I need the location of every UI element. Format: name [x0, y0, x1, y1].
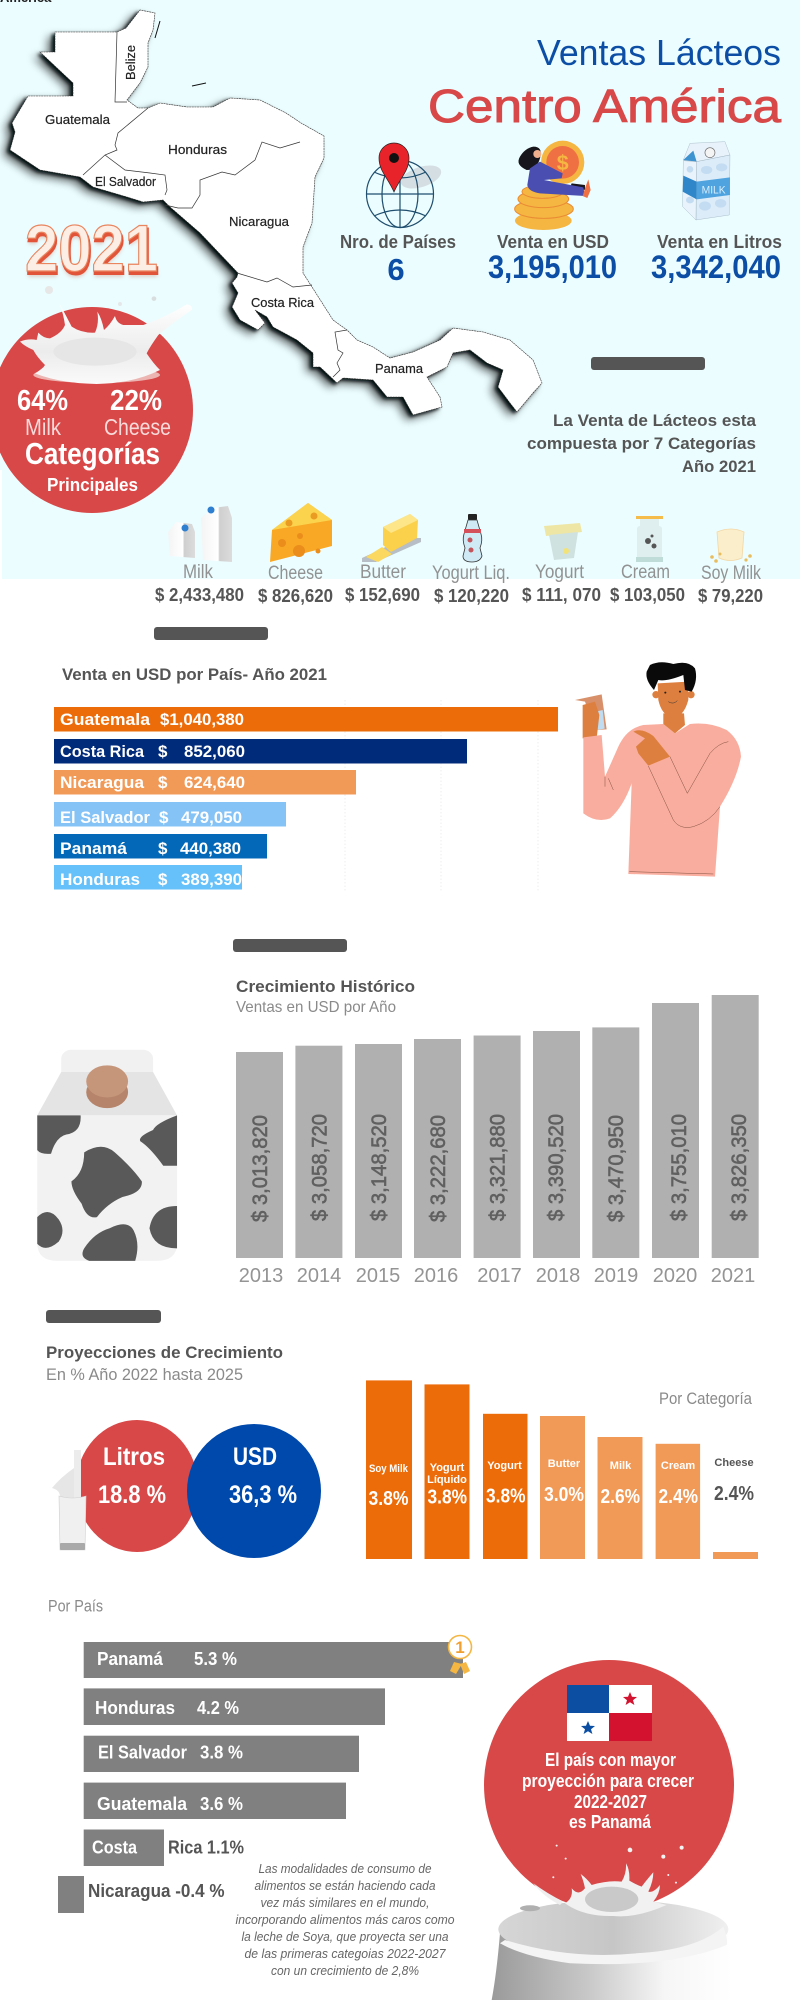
bar chart: categories: Yogurt [487, 1460, 522, 1472]
bar chart: yearly sales: 2017 [477, 1265, 522, 1287]
panel: Panama callout circle: es Panamá [569, 1812, 652, 1832]
bar chart: yearly sales [236, 995, 759, 1287]
bar chart: categories: Cream [661, 1460, 695, 1472]
bar chart: countries projection: Nicaragua -0.4 % [88, 1881, 224, 1901]
bar chart: countries: $ [158, 773, 168, 792]
panel: product categories: $ 120,220 [434, 586, 509, 606]
stat: sales litres: 3,342,040 [651, 249, 781, 285]
panel: historic growth [236, 977, 759, 1287]
panel: litres and USD circles [52, 1420, 321, 1558]
bar chart: categories: 3.8% [428, 1486, 467, 1508]
bar chart: countries projection: Costa [92, 1838, 138, 1858]
stat: sales litres [651, 142, 782, 285]
bar chart: categories: 2.6% [600, 1486, 640, 1508]
bar chart: categories: 3.0% [544, 1484, 584, 1506]
bar chart: yearly sales: $ 3,470,950 [605, 1115, 628, 1222]
panel: header background [0, 0, 800, 579]
panel: product categories: $ 103,050 [610, 585, 685, 605]
bar chart: countries: $ [158, 742, 168, 761]
bar chart: yearly sales: $ 3,222,680 [427, 1115, 450, 1222]
section marker [591, 357, 705, 370]
icon: milk carton: MILK [702, 184, 726, 196]
bar chart: countries: $ [158, 870, 168, 889]
bar chart: categories: 3.8% [368, 1488, 409, 1510]
bar chart: categories: Milk [610, 1460, 632, 1472]
bar chart: categories: Butter [548, 1458, 581, 1470]
year badge 2021: 2021 [26, 214, 159, 288]
bar chart: countries projection: 3.6 % [200, 1794, 243, 1814]
panel: main categories circle: 64% [17, 385, 68, 417]
bar chart: categories: 2.4% [658, 1486, 698, 1508]
panel: sales by country: Venta en USD por País- Año 2021 [62, 665, 327, 684]
panel: Panama callout circle: El país con mayor [545, 1750, 676, 1770]
panel: main categories circle: Categorías [25, 436, 160, 471]
bar chart: countries: Costa Rica [60, 742, 145, 761]
icon: Panama flag [567, 1685, 652, 1741]
bar chart: countries projection: Rica 1.1% [168, 1838, 244, 1858]
bar chart: yearly sales: $ 3,755,010 [668, 1114, 691, 1221]
bar chart: countries: $ [159, 808, 169, 827]
bar chart: yearly sales: 2013 [239, 1265, 283, 1287]
bar chart: countries projection: El Salvador [98, 1742, 187, 1762]
bar chart: countries projection: 5.3 % [194, 1649, 237, 1669]
section marker [154, 627, 268, 640]
bar chart: countries: 389,390 [181, 870, 242, 889]
panel: Panama callout circle: 2022-2027 [574, 1792, 647, 1812]
map of Central America: Costa Rica [251, 295, 315, 310]
panel: main categories circle [0, 286, 193, 513]
bar chart: yearly sales: 2016 [414, 1265, 458, 1287]
bar chart: countries: 440,380 [180, 839, 241, 858]
icon: first place medal: 1 [455, 1638, 465, 1657]
bar chart: countries: $1,040,380 [160, 710, 244, 729]
icon: cream jar [636, 516, 663, 562]
bar chart: countries: 479,050 [181, 808, 242, 827]
bar chart: countries: Nicaragua [60, 773, 145, 792]
text block: italic note: con un crecimiento de 2,8% [271, 1963, 419, 1978]
panel: product categories: Yogurt Liq. [432, 563, 510, 584]
icon: glass of milk [52, 1450, 86, 1550]
map of Central America [3, 10, 542, 420]
text block: italic note [236, 1861, 454, 1978]
heading: Ventas en USD por Año [236, 999, 396, 1016]
stat: countries: 6 [387, 252, 405, 287]
icon: butter [362, 514, 421, 562]
panel: main categories circle: Principales [47, 475, 138, 495]
panel: product categories: Cream [621, 562, 670, 583]
text: categories summary: Año 2021 [682, 458, 756, 476]
panel: product categories: Milk [183, 562, 213, 583]
bar chart: categories: Cheese [714, 1457, 754, 1469]
bar chart: countries: El Salvador [60, 808, 150, 827]
icon: yogurt cup [544, 523, 582, 560]
panel: product categories: $ 152,690 [345, 585, 420, 605]
icon: cheese [270, 503, 332, 562]
bar chart: yearly sales: $ 3,148,520 [368, 1114, 391, 1221]
bar chart: countries projection: Guatemala [97, 1794, 188, 1814]
stat: sales litres: Venta en Litros [657, 232, 782, 252]
panel: product categories [155, 503, 763, 606]
bar chart: countries: Honduras [60, 870, 140, 889]
title [428, 32, 781, 132]
text block: italic note: incorporando alimentos más caros como [236, 1912, 454, 1927]
bar chart: countries projection: Honduras [95, 1698, 175, 1718]
year badge 2021: 2021 [25, 211, 158, 285]
panel: Panama callout circle: proyección para crecer [522, 1771, 694, 1791]
title: Ventas Lácteos [537, 32, 781, 73]
panel: product categories: Butter [360, 562, 407, 583]
panel: projection by country [48, 1596, 472, 1913]
title: Centro América [428, 80, 781, 132]
panel: main categories circle: 22% [110, 385, 162, 417]
bar chart: categories: Yogurt [430, 1462, 465, 1474]
icon: soy milk glass [710, 529, 752, 563]
icon: milk carton [683, 142, 730, 220]
bar chart: countries: 852,060 [184, 742, 245, 761]
map of Central America: Guatemala [45, 112, 111, 127]
bar chart: countries: $ [158, 839, 168, 858]
bar chart: yearly sales: 2018 [536, 1265, 580, 1287]
text block: italic note: vez más similares en el mundo, [260, 1895, 430, 1910]
stat: sales USD: Venta en USD [497, 232, 609, 252]
panel: main categories circle: Milk [25, 414, 61, 440]
panel: litres and USD circles: 18.8 % [98, 1481, 166, 1509]
icon: milk splash [20, 286, 192, 384]
map of Central America: Nicaragua [229, 214, 290, 229]
heading [236, 977, 415, 1016]
map of Central America: El Salvador [95, 174, 157, 189]
icon: globe with pin [366, 143, 444, 228]
heading: projections [46, 1343, 283, 1384]
heading: Crecimiento Histórico [236, 977, 415, 996]
stat: sales USD [488, 141, 617, 285]
map of Central America: Honduras [168, 142, 228, 157]
text: categories summary [527, 412, 757, 476]
section marker [233, 939, 347, 952]
text: categories summary: La Venta de Lácteos esta [553, 412, 757, 430]
panel: projection by category: Por Categoría [659, 1389, 752, 1408]
icon: woman hugging coin on stack of coins: $ [557, 151, 569, 175]
panel: litres and USD circles: 36,3 % [229, 1481, 297, 1509]
text block: italic note: alimentos se están haciendo cada [254, 1878, 436, 1893]
bar chart: yearly sales: 2015 [356, 1265, 400, 1287]
year badge 2021: 2021 [26, 217, 159, 291]
panel: product categories: $ 111, 070 [522, 585, 601, 605]
icon: milk cartons [168, 506, 232, 562]
icon: yogurt bottle [463, 514, 482, 562]
bar chart: countries projection [58, 1642, 463, 1913]
panel: product categories: Cheese [268, 563, 323, 584]
panel: projection by country: Por País [48, 1596, 103, 1616]
panel: litres and USD circles: Litros [103, 1443, 165, 1471]
heading: projections: Proyecciones de Crecimiento [46, 1343, 283, 1362]
bar chart: yearly sales: $ 3,321,880 [486, 1114, 510, 1221]
text block: italic note: de las primeras categoias 2022-2027 [244, 1946, 446, 1961]
bar chart: categories: 2.4% [714, 1483, 754, 1505]
bar chart: countries projection: Panamá [97, 1649, 164, 1669]
map of Central America: Panama [375, 361, 424, 376]
bar chart: yearly sales: $ 3,013,820 [249, 1115, 272, 1222]
bar chart: categories: Líquido [427, 1474, 467, 1486]
text block: italic note: la leche de Soya, que proyecta ser una [242, 1929, 448, 1944]
section marker [46, 1310, 161, 1323]
icon: first place medal [448, 1636, 472, 1674]
panel: projection by category [366, 1380, 758, 1559]
map of Central America: Belize [123, 45, 138, 80]
stat: sales USD: 3,195,010 [488, 249, 617, 285]
illustration: glass with milk splash [492, 1845, 732, 2000]
bar chart: countries projection: 4.2 % [197, 1698, 239, 1718]
text block: italic note: Las modalidades de consumo de [258, 1861, 432, 1876]
bar chart: yearly sales: $ 3,390,520 [545, 1114, 568, 1221]
bar chart: countries projection: 3.8 % [200, 1742, 243, 1762]
bar chart: yearly sales: $ 3,058,720 [308, 1114, 332, 1221]
stat: countries: Nro. de Países [340, 232, 456, 252]
panel: product categories: $ 826,620 [258, 586, 333, 606]
heading: projections: En % Año 2022 hasta 2025 [46, 1365, 243, 1384]
panel: sales by country [54, 665, 558, 892]
illustration: man holding yogurt [575, 662, 741, 877]
panel: product categories: $ 79,220 [698, 586, 763, 606]
illustration: cow-pattern milk carton [37, 1050, 177, 1261]
bar chart: categories [366, 1380, 758, 1559]
panel: product categories: Yogurt [535, 562, 585, 583]
bar chart: yearly sales: $ 3,826,350 [728, 1114, 751, 1221]
bar chart: categories: Soy Milk [369, 1463, 409, 1475]
panel: litres and USD circles: USD [233, 1443, 277, 1471]
panel: product categories: $ 2,433,480 [155, 585, 244, 605]
stat: countries [340, 143, 456, 287]
bar chart: countries: Guatemala [60, 710, 151, 729]
bar chart: yearly sales: 2021 [711, 1265, 755, 1287]
panel: main categories circle: Cheese [104, 414, 171, 440]
bar chart: countries: Panamá [60, 839, 128, 858]
bar chart: countries [54, 707, 558, 890]
panel: Panama callout circle [484, 1660, 734, 1910]
bar chart: yearly sales: 2020 [653, 1265, 697, 1287]
bar chart: countries: 624,640 [184, 773, 245, 792]
bar chart: yearly sales: 2019 [594, 1265, 638, 1287]
icon: woman hugging coin on stack of coins [515, 141, 591, 230]
bar chart: categories: 3.8% [486, 1486, 526, 1508]
panel: product categories: Soy Milk [701, 563, 761, 584]
bar chart: yearly sales: 2014 [297, 1265, 341, 1287]
text: categories summary: compuesta por 7 Categorías [527, 435, 756, 453]
